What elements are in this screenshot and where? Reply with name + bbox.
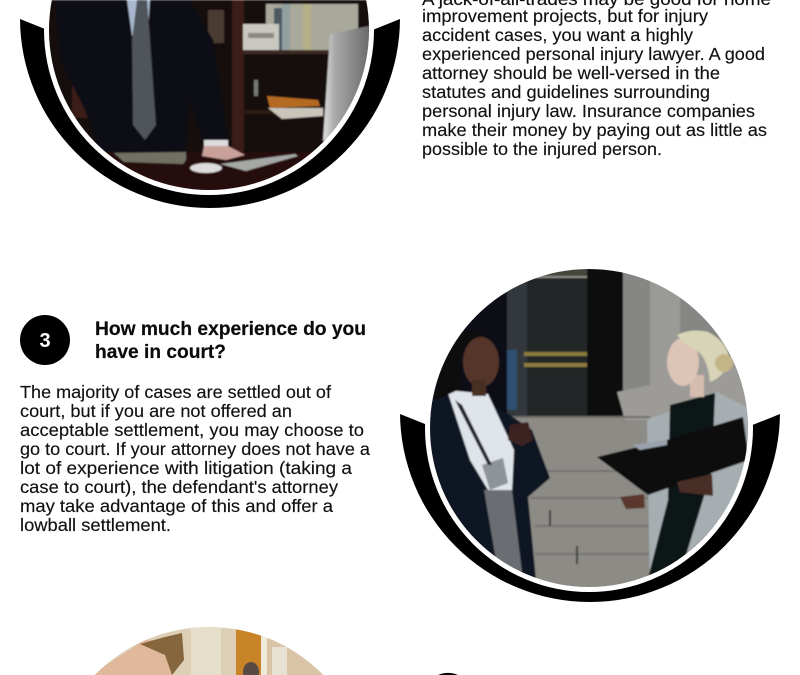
text block: step 3 body copy: The majority of cases are settled out of [20,382,331,402]
panel: step 3 portrait of two women outside court [400,269,780,602]
text block: step 3 body copy: court, but if you are not offered an [20,401,292,421]
text block: step 2 body copy [422,0,771,159]
text block: step 3 body copy [20,382,370,535]
white ring around lawyer photo [44,0,374,195]
icon: number 3 badge [20,315,70,365]
photo: room background [95,627,323,675]
black crescent behind courthouse photo [400,414,780,602]
text block: step 2 body copy: make their money by paying out as little as [422,120,767,140]
photo: lawyer in suit at desk [49,0,369,190]
panel: step 2 portrait of lawyer at desk [20,0,400,208]
black crescent behind lawyer photo [20,0,400,208]
text block: step 3 body copy: may take advantage of this and offer a [20,496,333,516]
text block: step 2 body copy: personal injury law. Insurance companies [422,101,755,121]
heading: step 3 question: have in court? [95,342,226,363]
text block: step 3 body copy: go to court. If your attorney does not have a [20,439,370,459]
text block: step 3 body copy: acceptable settlement, you may choose to [20,420,364,440]
heading: step 3 question: How much experience do you [95,319,366,340]
photo: man's head and hair [90,633,184,675]
text block: step 2 body copy: improvement projects, but for injury [422,6,708,26]
text block: step 2 body copy: experienced personal injury lawyer. A good [422,44,765,64]
text block: step 2 body copy: possible to the injured person. [422,139,662,159]
text block: step 3 body copy: lowball settlement. [20,515,171,535]
icon: number 3 badge: 3 [39,330,51,352]
text block: step 2 body copy: attorney should be well-versed in the [422,63,720,83]
text block: step 3 body copy: lot of experience with litigation (taking a [20,458,352,478]
text block: step 2 body copy: accident cases, you want a highly [422,25,693,45]
panel: step 4 photo, partially visible [94,627,324,675]
white ring around courthouse photo [425,264,753,592]
heading: step 3 question [95,319,366,363]
photo: two women on courthouse steps [430,269,748,587]
text block: step 3 body copy: case to court), the defendant's attorney [20,477,338,497]
text block: step 2 body copy: statutes and guidelines surrounding [422,82,710,102]
icon: step 4 number badge, partially visible [438,673,458,675]
